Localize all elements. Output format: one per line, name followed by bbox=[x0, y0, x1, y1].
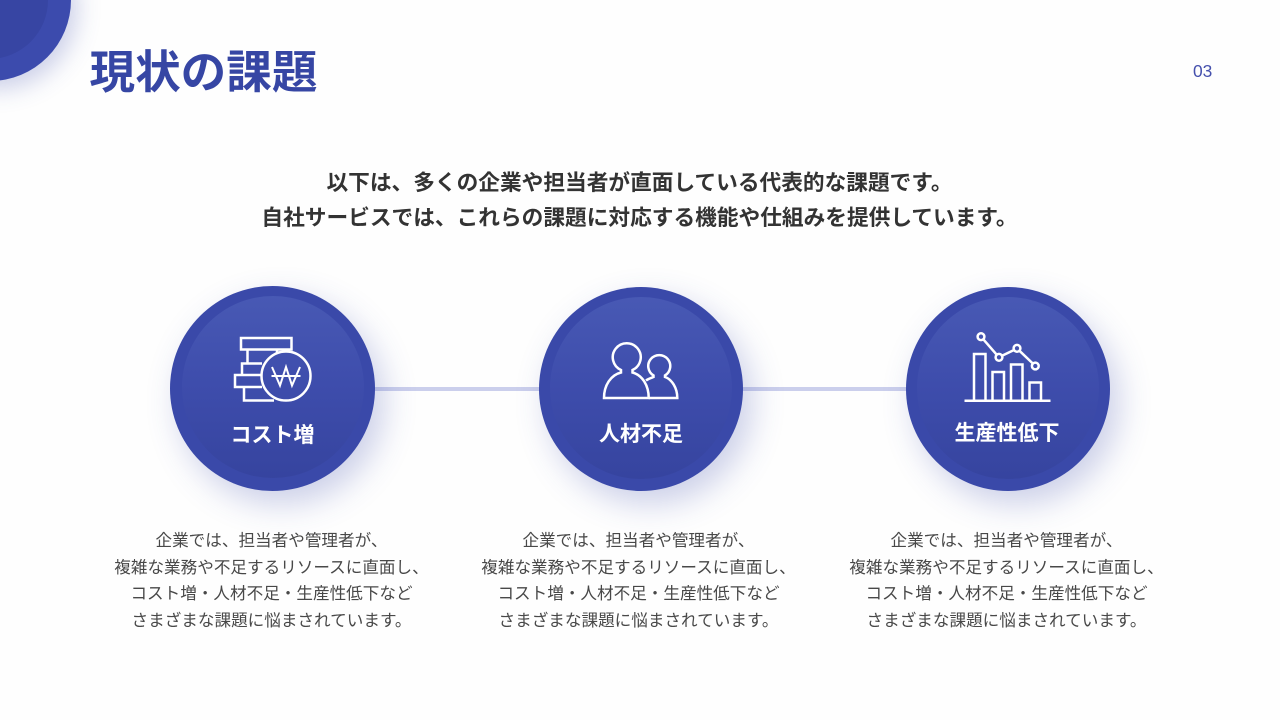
intro text: 自社サービスでは、これらの課題に対応する機能や仕組みを提供しています。 bbox=[261, 205, 1018, 230]
description: staff shortage: 企業では、担当者や管理者が、 bbox=[522, 531, 754, 550]
description: productivity decline: さまざまな課題に悩まされています。 bbox=[867, 610, 1146, 630]
description: cost increase: コスト増・人材不足・生産性低下など bbox=[130, 584, 413, 603]
description: staff shortage: 複雑な業務や不足するリソースに直面し、 bbox=[481, 558, 796, 576]
connector line: second to third bbox=[738, 387, 913, 391]
label: staff shortage: 人材不足 bbox=[599, 422, 683, 446]
description: staff shortage: さまざまな課題に悩まされています。 bbox=[499, 610, 778, 630]
description: cost increase: さまざまな課題に悩まされています。 bbox=[132, 610, 411, 630]
icon: coins bbox=[235, 338, 310, 400]
description: staff shortage: コスト増・人材不足・生産性低下など bbox=[497, 584, 780, 603]
description: cost increase: 複雑な業務や不足するリソースに直面し、 bbox=[114, 558, 429, 576]
description: cost increase bbox=[114, 531, 429, 630]
intro text: 以下は、多くの企業や担当者が直面している代表的な課題です。 bbox=[326, 170, 953, 195]
description: productivity decline: コスト増・人材不足・生産性低下など bbox=[865, 584, 1148, 603]
icon: bar chart with trend line bbox=[964, 333, 1050, 401]
description: productivity decline: 企業では、担当者や管理者が、 bbox=[890, 531, 1122, 550]
label: cost increase: コスト増 bbox=[230, 424, 314, 447]
description: productivity decline: 複雑な業務や不足するリソースに直面し、 bbox=[849, 558, 1164, 576]
circle: staff shortage bbox=[539, 286, 743, 490]
description: productivity decline bbox=[849, 531, 1164, 630]
decorative corner circle bbox=[0, 0, 71, 81]
connector line: first to second bbox=[370, 387, 545, 391]
description: cost increase: 企業では、担当者や管理者が、 bbox=[156, 531, 387, 550]
intro text bbox=[261, 170, 1018, 230]
label: productivity decline: 生産性低下 bbox=[954, 422, 1060, 444]
page number: 03 bbox=[1193, 61, 1212, 81]
description: staff shortage bbox=[481, 531, 796, 630]
icon: two people bbox=[604, 343, 677, 398]
title: 現状の課題 bbox=[90, 47, 317, 98]
circle: productivity decline bbox=[906, 286, 1110, 490]
circle: cost increase bbox=[170, 286, 375, 491]
